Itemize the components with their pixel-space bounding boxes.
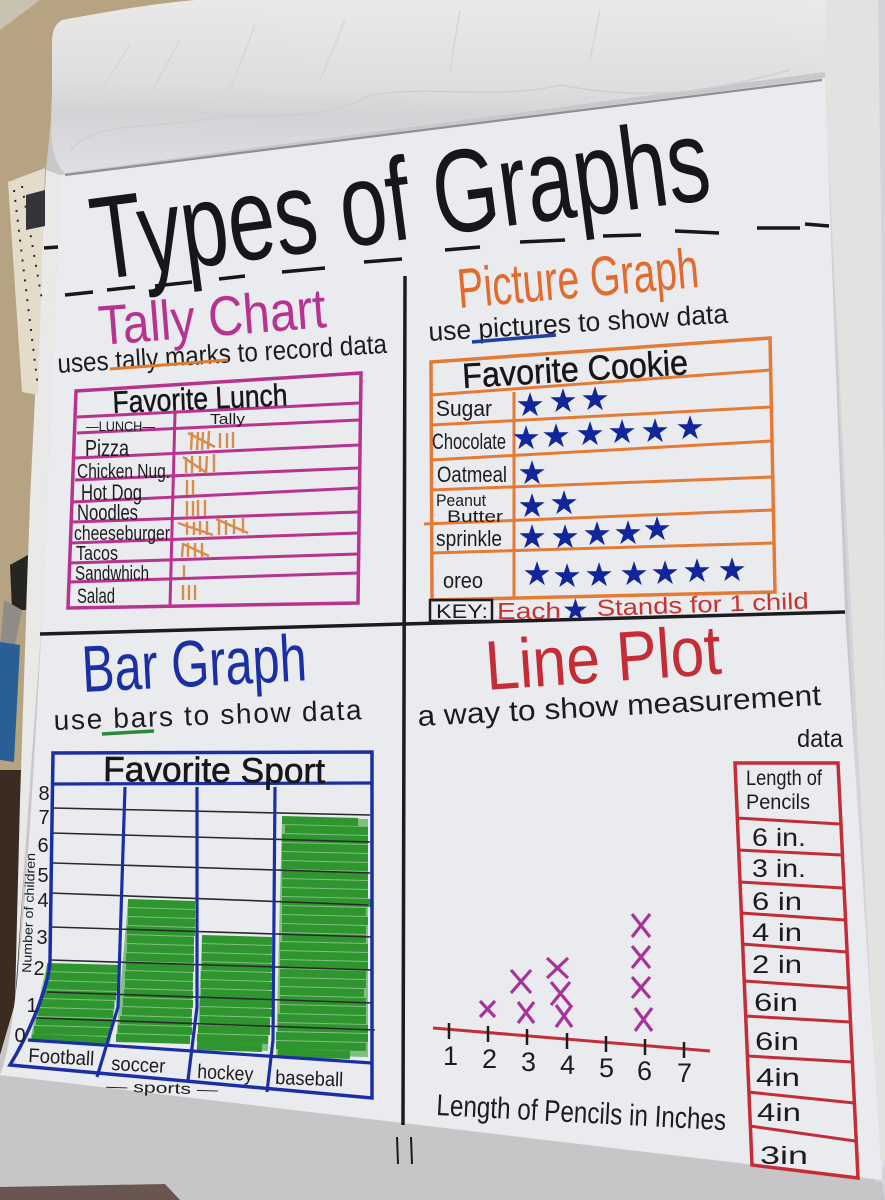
grid lines xyxy=(37,808,375,1030)
line plot chart: 2 xyxy=(482,1044,497,1074)
panel: line plot xyxy=(417,611,858,1178)
stars: ★ xyxy=(550,517,580,556)
table: favorite lunch: Salad xyxy=(77,585,115,608)
table: favorite lunch: Tally xyxy=(210,411,246,428)
key: KEY: xyxy=(436,602,488,623)
x axis labels xyxy=(28,1045,344,1099)
table: favorite lunch: Favorite Lunch xyxy=(112,377,288,420)
table: favorite cookie: Favorite Cookie xyxy=(461,343,689,396)
y axis labels: 8 xyxy=(38,783,50,805)
table: favorite lunch: —LUNCH— xyxy=(86,418,155,434)
line plot chart: 5 xyxy=(599,1053,614,1083)
stars: ★ xyxy=(517,486,547,525)
table: favorite lunch xyxy=(68,373,361,608)
table: length of pencils: 6in xyxy=(754,989,798,1017)
y axis labels: 6 xyxy=(37,835,49,857)
y axis labels: 3 xyxy=(36,927,48,949)
stars: ★ xyxy=(650,553,680,592)
stars: ★ xyxy=(613,513,643,552)
y axis labels: 7 xyxy=(38,807,50,829)
green bar base tint xyxy=(30,817,368,1057)
description: line plot xyxy=(417,680,843,753)
table: length of pencils: 4in xyxy=(757,1099,801,1127)
y axis labels: 4 xyxy=(37,890,49,912)
stars: ★ xyxy=(522,554,552,593)
key xyxy=(430,588,809,628)
stars: ★ xyxy=(515,385,545,424)
stars xyxy=(511,379,747,595)
y axis labels: 2 xyxy=(33,958,45,980)
table: length of pencils xyxy=(735,763,858,1178)
key: ★ xyxy=(562,593,589,628)
table: length of pencils: 4in xyxy=(756,1064,800,1092)
y axis labels: 5 xyxy=(37,865,49,887)
quadrant dividers xyxy=(40,276,845,1164)
stars: ★ xyxy=(682,551,712,590)
table: length of pencils: 2 in xyxy=(752,951,802,979)
y axis labels: 1 xyxy=(26,995,38,1017)
heading: Tally Chart: Tally Chart xyxy=(96,276,329,357)
table: favorite lunch: Chicken Nug. xyxy=(77,461,170,483)
x axis labels: hockey xyxy=(197,1061,254,1086)
line plot chart xyxy=(433,914,727,1137)
description: picture graph: use pictures to show data xyxy=(428,299,730,347)
green bars xyxy=(32,820,372,1055)
table: length of pencils: 3 in. xyxy=(752,855,806,883)
y axis labels: 0 xyxy=(14,1025,26,1047)
x axis labels: — sports — xyxy=(106,1078,218,1099)
stars: ★ xyxy=(582,514,612,553)
stars: ★ xyxy=(717,550,747,589)
underline: pictures xyxy=(472,335,556,342)
table: favorite cookie: Chocolate xyxy=(432,429,506,454)
table: favorite lunch: Sandwhich xyxy=(75,563,149,585)
table: length of pencils: 4 in xyxy=(752,919,802,947)
table: favorite cookie: Peanut xyxy=(436,491,486,510)
panel: tally chart xyxy=(57,276,389,608)
stars: ★ xyxy=(642,509,672,548)
heading: Bar Graph: Bar Graph xyxy=(80,620,308,706)
table: favorite cookie: oreo xyxy=(443,568,483,593)
stars: ★ xyxy=(575,414,605,453)
underline: bars xyxy=(102,731,154,734)
stars: ★ xyxy=(584,555,614,594)
panel: picture graph xyxy=(424,236,809,628)
table: length of pencils: 6 in xyxy=(752,888,802,916)
stars: ★ xyxy=(580,379,610,418)
stars: ★ xyxy=(607,412,637,451)
table: length of pencils: 6 in. xyxy=(752,824,806,852)
key: Each xyxy=(497,598,561,624)
description: tally chart: uses tally marks to record data xyxy=(57,329,389,379)
tally marks xyxy=(178,431,248,600)
line plot chart: 6 xyxy=(637,1056,652,1086)
table: length of pencils: Pencils xyxy=(746,791,810,814)
x marks xyxy=(480,914,652,1031)
stars: ★ xyxy=(619,554,649,593)
table: favorite cookie xyxy=(424,338,809,628)
dashed title underline xyxy=(44,224,829,295)
stars: ★ xyxy=(511,418,541,457)
stars: ★ xyxy=(640,411,670,450)
table: length of pencils: Length of xyxy=(746,767,822,790)
chart: favorite sport xyxy=(10,750,375,1099)
key: Stands for 1 child xyxy=(596,588,809,621)
table: favorite lunch: Tacos xyxy=(76,543,118,565)
table: favorite lunch: cheeseburger xyxy=(74,523,170,545)
line plot chart: 4 xyxy=(560,1050,575,1080)
chart: favorite sport: Number of children xyxy=(19,853,38,973)
x axis labels: Football xyxy=(28,1045,95,1070)
axis title: Length of Pencils in Inches xyxy=(436,1089,727,1137)
x axis labels: soccer xyxy=(111,1053,166,1078)
dotted notice board xyxy=(8,168,45,395)
stars: ★ xyxy=(549,483,579,522)
stars: ★ xyxy=(675,408,705,447)
description: bar graph: use bars to show data xyxy=(53,694,362,736)
table: favorite cookie: Butter xyxy=(447,507,503,526)
panel: bar graph xyxy=(10,620,375,1099)
line plot chart: 1 xyxy=(443,1041,458,1071)
stars: ★ xyxy=(541,416,571,455)
table: length of pencils: 3in xyxy=(760,1142,808,1170)
rolled-over paper at the top xyxy=(51,0,826,175)
stars: ★ xyxy=(517,517,547,556)
table: favorite cookie: Sugar xyxy=(436,396,492,421)
y axis labels xyxy=(14,783,50,1047)
table: length of pencils: 6in xyxy=(755,1028,799,1056)
table: favorite lunch: Hot Dog xyxy=(81,480,142,505)
table: favorite cookie: Oatmeal xyxy=(437,462,507,487)
table: favorite lunch: Noodles xyxy=(77,500,138,525)
description: line plot: data xyxy=(797,725,843,753)
description: line plot: a way to show measurement xyxy=(417,680,822,733)
underline: tally marks xyxy=(110,360,228,369)
stars: ★ xyxy=(548,381,578,420)
stars: ★ xyxy=(517,453,547,492)
heading: Line Plot: Line Plot xyxy=(483,611,723,705)
chart: favorite sport: Favorite Sport xyxy=(103,750,326,791)
x axis labels: baseball xyxy=(275,1067,344,1091)
line plot chart: 7 xyxy=(677,1058,692,1088)
stars: ★ xyxy=(552,556,582,595)
heading: Picture Graph: Picture Graph xyxy=(455,236,701,320)
table: favorite cookie: sprinkle xyxy=(436,526,502,551)
line plot chart: 3 xyxy=(521,1047,536,1077)
table: favorite lunch: Pizza xyxy=(85,435,129,461)
